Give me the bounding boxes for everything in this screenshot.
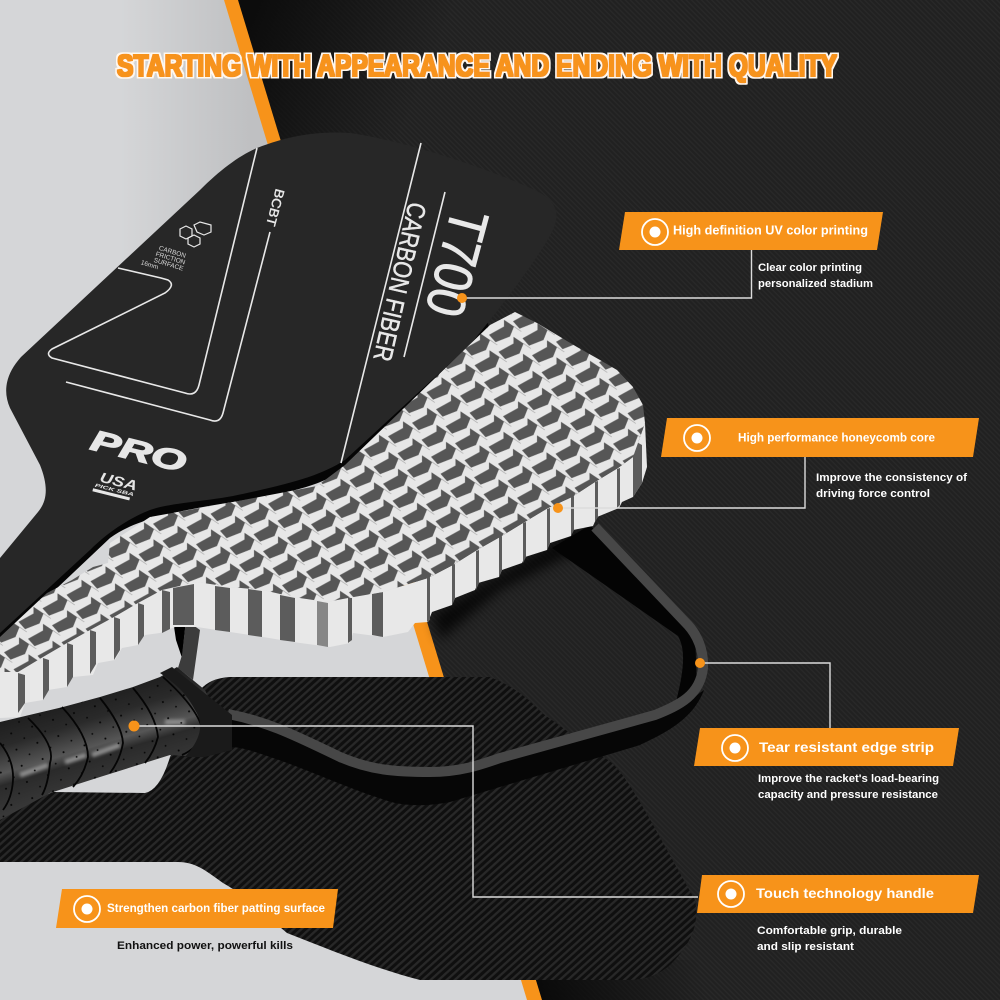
main paddle black edge <box>0 300 490 642</box>
edge strip inner black side, lower <box>225 690 704 805</box>
title: STARTING WITH APPEARANCE AND ENDING WITH QUALITY <box>117 48 837 83</box>
background: dark shading at the bottom <box>528 960 720 1000</box>
background: dark carbon right area <box>236 0 1000 1000</box>
background: dark shading near the band <box>236 0 520 140</box>
text: edge strip description: capacity and pressure resistance <box>758 789 938 801</box>
text: handle description: and slip resistant <box>757 941 854 953</box>
main paddle face <box>0 133 557 633</box>
callout: tear resistant edge strip <box>694 728 959 766</box>
brand label: BCBT <box>263 187 288 228</box>
racket neck <box>173 620 200 680</box>
grip wrap seams <box>0 677 203 810</box>
text: UV printing description: personalized stadium <box>758 278 873 290</box>
honeycomb shadow on inner surface <box>432 530 600 640</box>
callout: strengthen carbon fiber patting surface: Strengthen carbon fiber patting surface <box>107 903 325 915</box>
handle highlights <box>20 722 185 775</box>
text: handle description: Comfortable grip, durable <box>757 925 902 937</box>
surface spec text: CARBON <box>158 245 187 260</box>
callout: high performance honeycomb core: High performance honeycomb core <box>738 432 935 444</box>
icon: hexagon trio <box>180 222 211 247</box>
USA badge <box>92 468 139 501</box>
text: surface description: Enhanced power, powerful kills <box>117 940 293 952</box>
handle body <box>0 667 225 820</box>
orange diagonal band <box>224 0 542 1000</box>
paddle silhouette <box>0 133 557 633</box>
text: edge strip description: Improve the racket's load-bearing <box>758 773 939 785</box>
callout: high definition UV color printing <box>619 212 883 250</box>
text: handle description <box>757 925 902 953</box>
surface spec text: 16mm <box>140 259 159 271</box>
callout leader lines <box>134 250 830 897</box>
USA badge: USA <box>98 469 139 494</box>
callout: strengthen carbon fiber patting surface <box>56 889 338 928</box>
PRO label: PRO <box>87 425 190 479</box>
text: honeycomb description <box>816 472 967 500</box>
anchor: UV printing <box>457 293 467 303</box>
tear resistant edge strip frame <box>225 525 704 805</box>
anchor dots <box>128 293 705 732</box>
callout: touch technology handle: Touch technology handle <box>756 885 934 901</box>
callout: touch technology handle <box>697 875 979 913</box>
USA badge: PICK SBA <box>94 483 135 498</box>
anchor: edge strip <box>695 658 705 668</box>
surface spec text: FRICTION <box>155 251 186 267</box>
honeycomb core <box>0 312 647 718</box>
handle collar <box>160 667 232 757</box>
surface spec text <box>140 241 189 279</box>
handle perforation dots <box>0 667 225 820</box>
CARBON FIBER label: CARBON FIBER <box>367 200 432 364</box>
honeycomb front walls <box>0 423 647 718</box>
callout: high definition UV color printing: High definition UV color printing <box>673 224 868 238</box>
edge strip inner black side, right <box>552 525 697 702</box>
text: UV printing description <box>758 262 873 290</box>
text: UV printing description: Clear color printing <box>758 262 862 274</box>
surface spec text: SURFACE <box>153 257 185 273</box>
callout: tear resistant edge strip: Tear resistant edge strip <box>759 739 934 755</box>
honeycomb top cells <box>0 312 645 672</box>
text: honeycomb description: driving force control <box>816 488 930 500</box>
paddle white graphic lines <box>48 143 445 463</box>
background: grey shading beside the band <box>120 0 290 270</box>
anchor: honeycomb <box>553 503 563 513</box>
text: honeycomb description: Improve the consistency of <box>816 472 967 484</box>
T700 label: T700 <box>413 203 499 323</box>
callout: high performance honeycomb core <box>661 418 979 457</box>
edge strip grey top face <box>228 527 703 772</box>
anchor: handle <box>128 720 140 732</box>
honeycomb wall shadow strips <box>18 440 642 713</box>
lower paddle: carbon fiber surface <box>0 677 696 980</box>
text: edge strip description <box>758 773 939 801</box>
grip handle <box>0 667 232 820</box>
